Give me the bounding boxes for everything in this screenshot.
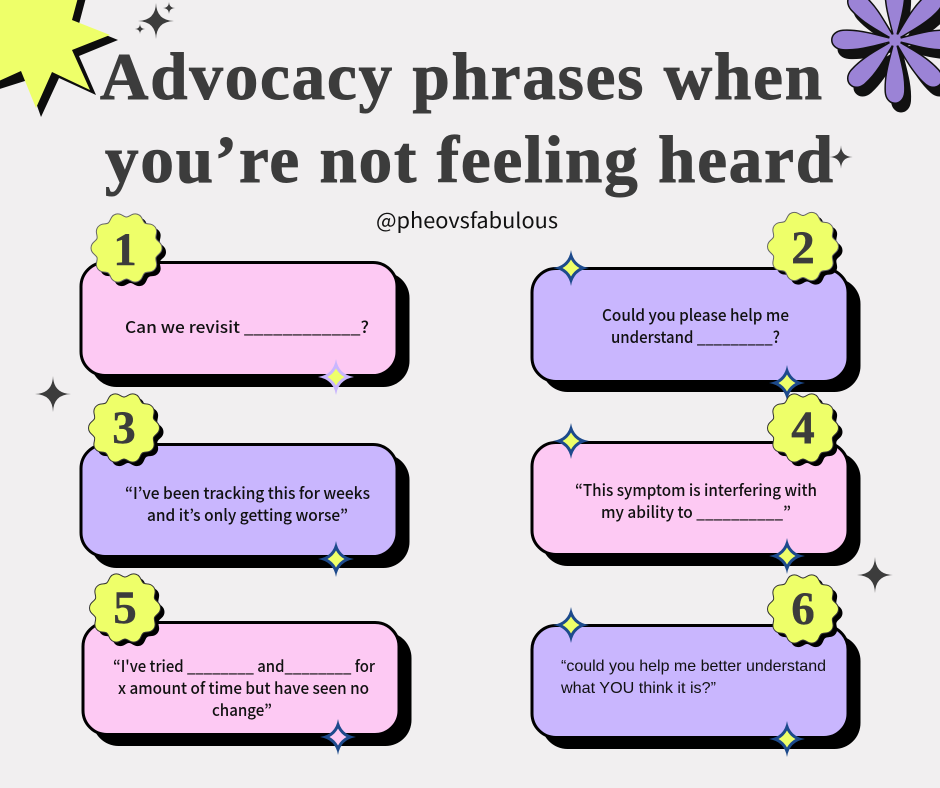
phrase 5 text bbox=[113, 653, 375, 721]
icon: card sparkle 2 top bbox=[553, 250, 589, 286]
panel: phrase 4 bbox=[532, 442, 860, 566]
phrase 2 text: Could you please help me bbox=[602, 302, 789, 326]
phrase 3 text: “I’ve been tracking this for weeks bbox=[125, 480, 370, 504]
badge 6: 6 bbox=[791, 583, 815, 635]
badge 5: 5 bbox=[113, 582, 137, 634]
title: Advocacy phrases when bbox=[100, 40, 822, 114]
badge 3 bbox=[88, 394, 164, 466]
phrase 6 text: what YOU think it is?” bbox=[560, 680, 716, 697]
icon: dark sparkles top bbox=[135, 2, 175, 39]
icon: card sparkle 5 bbox=[320, 719, 356, 755]
panel: phrase 5 bbox=[83, 622, 412, 746]
phrase 3 text: and it’s only getting worse” bbox=[147, 502, 348, 526]
phrase 3 text bbox=[125, 480, 370, 526]
panel: phrase 3 bbox=[81, 444, 410, 568]
phrase 5 text: “I've tried ________ and________ for bbox=[113, 653, 375, 677]
badge 2 bbox=[768, 212, 842, 285]
icon: card sparkle 4 bottom bbox=[769, 538, 805, 574]
icon: card sparkle 6 bottom bbox=[769, 721, 805, 757]
phrase 2 text bbox=[602, 302, 789, 348]
phrase 5 text: change” bbox=[212, 697, 272, 721]
phrase 4 text: my ability to __________” bbox=[601, 499, 791, 523]
badge 1 bbox=[91, 214, 166, 286]
badge 4 bbox=[768, 394, 842, 466]
icon: dark sparkle left bbox=[35, 376, 71, 412]
phrase 5 text: x amount of time but have seen no bbox=[118, 675, 369, 699]
phrase 2 text: understand _________? bbox=[611, 324, 780, 348]
phrase 1 text: Can we revisit ____________? bbox=[125, 314, 369, 338]
icon: card sparkle 1 bbox=[318, 359, 354, 395]
icon: card sparkle 3 bbox=[318, 541, 354, 577]
icon: purple flower bbox=[832, 0, 940, 112]
panel: phrase 6 bbox=[532, 626, 860, 749]
title bbox=[100, 40, 833, 197]
icon: sparkle beside title bbox=[829, 145, 853, 169]
panel: phrase 2 bbox=[532, 268, 860, 392]
badge 6 bbox=[768, 575, 842, 647]
phrase 4 text bbox=[575, 477, 817, 523]
icon: card sparkle 6 top bbox=[553, 607, 589, 643]
badge 4: 4 bbox=[791, 402, 815, 454]
handle: @pheovsfabulous bbox=[376, 205, 558, 235]
icon: dark sparkle right bbox=[857, 557, 893, 593]
icon: card sparkle 4 top bbox=[553, 423, 589, 459]
badge 2: 2 bbox=[791, 222, 815, 274]
phrase 6 text: “could you help me better understand bbox=[561, 658, 826, 675]
phrase 6 text bbox=[560, 658, 826, 697]
badge 1: 1 bbox=[113, 224, 137, 276]
panel: phrase 1 bbox=[81, 262, 410, 387]
icon: yellow starburst bbox=[0, 0, 118, 117]
badge 3: 3 bbox=[112, 402, 136, 454]
title: you’re not feeling heard bbox=[105, 123, 833, 197]
badge 5 bbox=[90, 574, 164, 646]
phrase 4 text: “This symptom is interfering with bbox=[575, 477, 817, 501]
icon: card sparkle 2 bottom bbox=[769, 365, 805, 401]
